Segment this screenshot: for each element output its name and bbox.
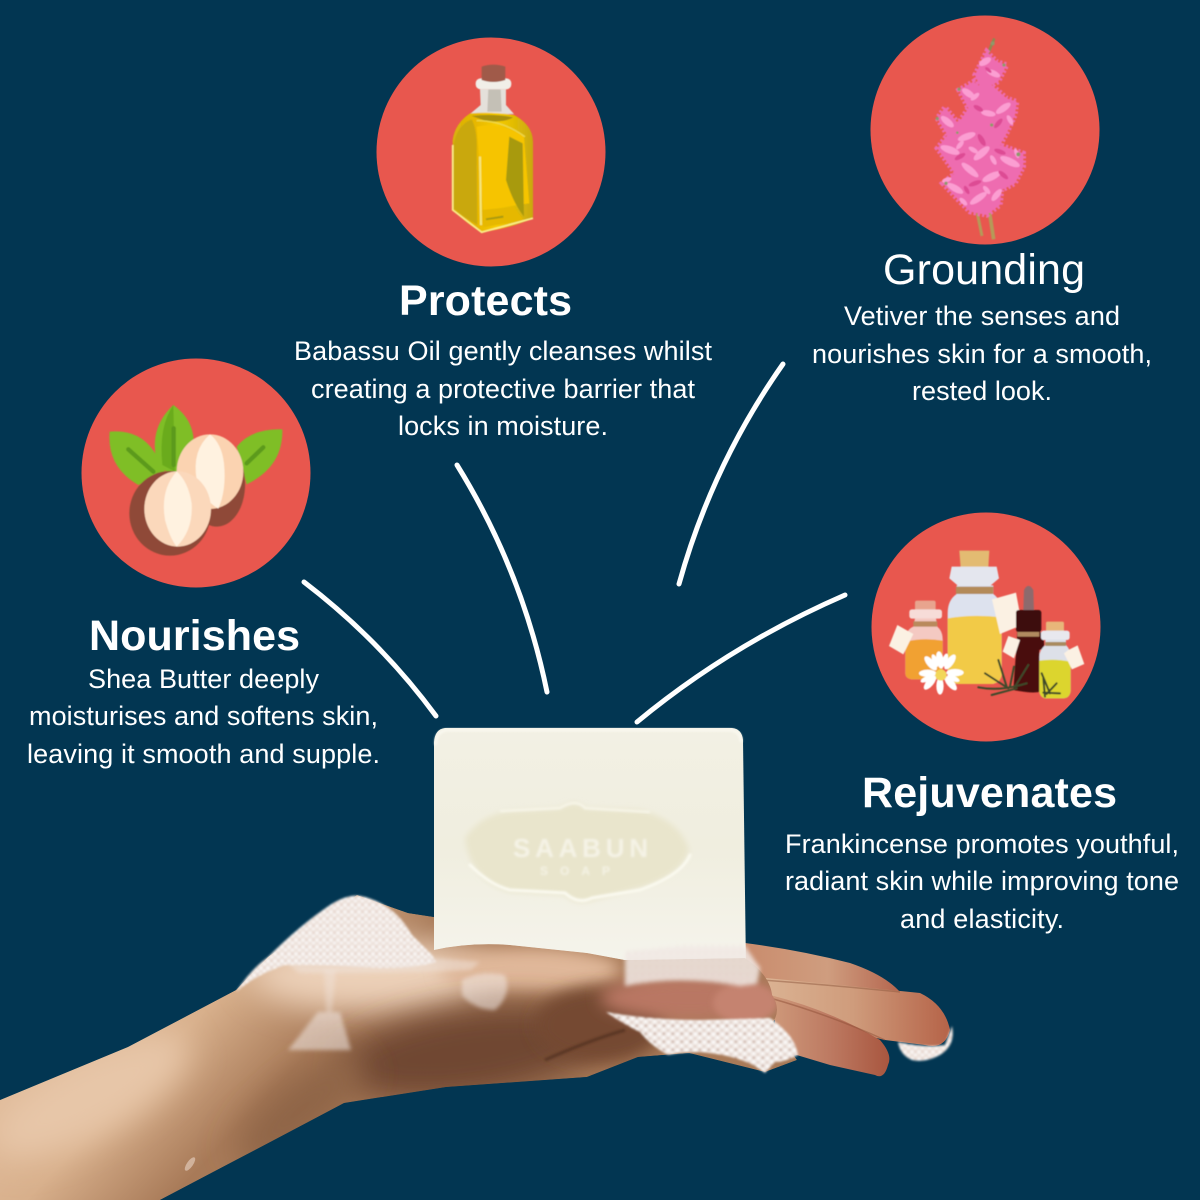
heading: Rejuvenates: Rejuvenates [862, 769, 1117, 817]
text block: Nourishes description: moisturises and softens skin, [29, 701, 378, 731]
icon: shea nuts and leaves in red circle [82, 358, 310, 588]
text block: Rejuvenates description [785, 829, 1179, 934]
middle finger [755, 977, 950, 1046]
ring finger [770, 995, 889, 1076]
text block: Nourishes description: Shea Butter deeply [88, 664, 320, 694]
text block: Grounding description: Vetiver the senses and [844, 301, 1120, 331]
text block: Rejuvenates description: radiant skin while improving tone [785, 866, 1179, 896]
icon: babassu oil bottle in red circle [376, 38, 606, 266]
icon: vetiver flower in red circle [870, 16, 1100, 244]
text block: Grounding description [812, 301, 1152, 406]
foam bubbles [183, 896, 953, 1172]
heading: Nourishes: Nourishes [89, 612, 300, 660]
text block: Protects description [294, 336, 712, 441]
text block: Nourishes description [27, 664, 380, 769]
text block: Protects description: locks in moisture. [398, 411, 608, 441]
text block: Nourishes description: leaving it smooth and supple. [27, 739, 380, 769]
text block: Protects description: Babassu Oil gently cleanses whilst [294, 336, 712, 366]
connector line: Protects to soap [457, 465, 547, 692]
text block: Grounding description: rested look. [912, 376, 1052, 406]
text block: Grounding description: nourishes skin for a smooth, [812, 339, 1152, 369]
text block: Protects description: creating a protective barrier that [311, 374, 695, 404]
soap bar [434, 728, 746, 970]
icon: essential oil bottles in red circle [872, 512, 1100, 742]
soap bar: SOAP [540, 864, 610, 878]
text block: Rejuvenates description: and elasticity. [900, 904, 1064, 934]
soap bar: SAABUN [513, 833, 648, 863]
heading: Grounding: Grounding [883, 246, 1085, 294]
top finger [740, 943, 900, 992]
text block: Rejuvenates description: Frankincense promotes youthful, [785, 829, 1179, 859]
heading: Protects: Protects [399, 277, 572, 325]
hand holding soap [0, 895, 950, 1200]
connector line: Grounding to soap [679, 364, 783, 584]
connector line: Nourishes to soap [304, 582, 436, 716]
connector line: Rejuvenates to soap [637, 595, 845, 722]
